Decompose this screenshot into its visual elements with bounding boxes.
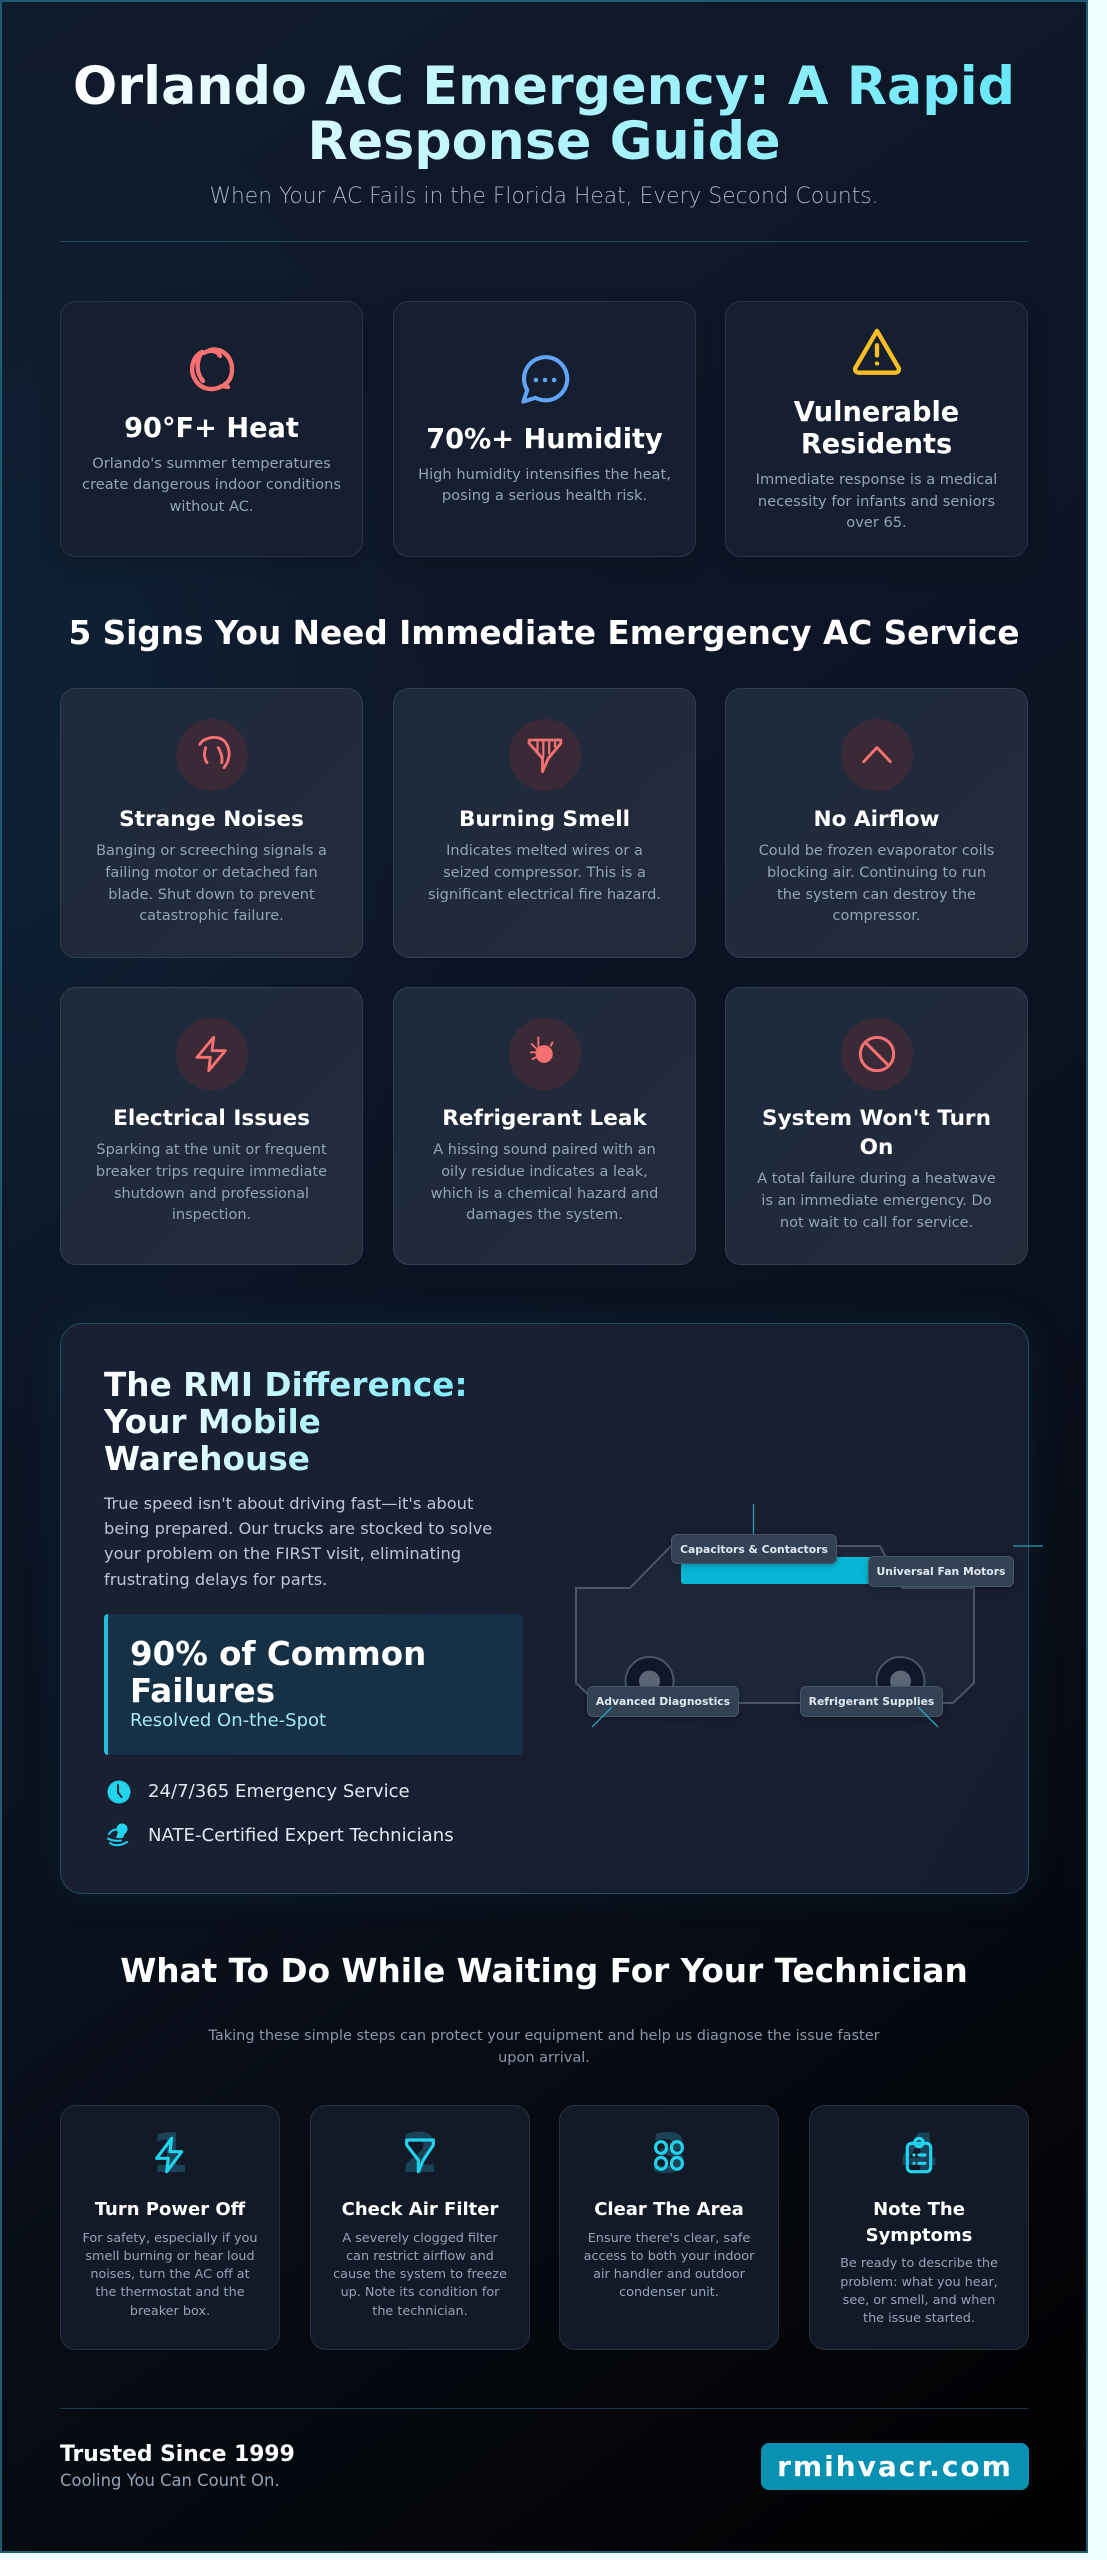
- panel: strange noises: [60, 688, 363, 958]
- panel: burning smell: [393, 688, 696, 958]
- text: Orlando's summer temperatures create dangerous indoor conditions without AC.: [82, 455, 341, 515]
- label: fan motors: [868, 1556, 1014, 1587]
- footer: website button: [761, 2443, 1029, 2490]
- callout lines: [592, 1504, 1043, 1728]
- label: fan motors: Universal Fan Motors: [876, 1565, 1005, 1578]
- panel: refrigerant leak: [393, 987, 696, 1265]
- heading: Refrigerant Leak: [442, 1106, 647, 1130]
- label: refrigerant: [800, 1686, 943, 1717]
- text: High humidity intensifies the heat, posing a serious health risk.: [418, 466, 671, 504]
- heading: signs: 5 Signs You Need Immediate Emergency AC Service: [68, 614, 1020, 652]
- heading: Strange Noises: [119, 806, 304, 832]
- label: NATE-Certified Expert Technicians: [148, 1825, 454, 1846]
- heading: Electrical Issues: [113, 1106, 310, 1130]
- step number: 3: [650, 2122, 688, 2185]
- panel: system won't turn on: [725, 987, 1028, 1265]
- title: Orlando AC Emergency: A Rapid Response Guide: [73, 56, 1015, 172]
- icon: warning triangle: [852, 328, 902, 375]
- text: A total failure during a heatwave is an immediate emergency. Do not wait to call for service.: [757, 1171, 996, 1231]
- heading: Clear The Area: [594, 2199, 744, 2220]
- text: Be ready to describe the problem: what you hear, see, or smell, and when the issue started.: [840, 2256, 998, 2326]
- icon: four rings: [654, 2140, 684, 2171]
- heading: Check Air Filter: [342, 2199, 498, 2220]
- panel: no airflow: [725, 688, 1028, 958]
- step number: 2: [401, 2122, 439, 2185]
- label: 24/7/365 Emergency Service: [148, 1781, 410, 1802]
- icon: chat bubble: [521, 355, 570, 404]
- step number: 1: [151, 2122, 189, 2185]
- text: Sparking at the unit or frequent breaker trips require immediate shutdown and professional inspection.: [96, 1142, 327, 1223]
- icon: chevron: [841, 719, 913, 791]
- feature: emergency service: [108, 1780, 410, 1804]
- text: Banging or screeching signals a failing motor or detached fan blade. Shut down to prevent catastrophic failure.: [96, 843, 327, 924]
- stat label: Resolved On-the-Spot: [130, 1710, 326, 1731]
- panel: vulnerable residents: [725, 301, 1028, 557]
- panel: check air filter: [310, 2105, 530, 2350]
- text: RMI intro: True speed isn't about driving fast—it's about being prepared. Our trucks are stocked to solve your problem on the FIRST visit, eliminating frustrating delays for parts.: [104, 1494, 492, 1589]
- panel: electrical issues: [60, 987, 363, 1265]
- panel: note the symptoms: [809, 2105, 1029, 2350]
- label: diagnostics: [587, 1686, 739, 1717]
- footer: trust statement: [60, 2442, 295, 2490]
- heading: System Won't Turn On: [762, 1106, 991, 1160]
- text: Could be frozen evaporator coils blocking air. Continuing to run the system can destroy the compressor.: [759, 843, 994, 924]
- feature: certified technicians: [107, 1824, 454, 1846]
- subtitle: When Your AC Fails in the Florida Heat, Every Second Counts.: [209, 184, 879, 209]
- icon: clipboard: [906, 2136, 932, 2174]
- text: Ensure there's clear, safe access to both your indoor air handler and outdoor condenser unit.: [584, 2231, 754, 2300]
- callout: 90% stat: [104, 1614, 523, 1755]
- icon: clock: [108, 1780, 130, 1804]
- heading: Turn Power Off: [95, 2199, 245, 2220]
- panel: RMI difference: [60, 1323, 1029, 1894]
- icon: funnel: [405, 2138, 435, 2174]
- icon: lightning: [155, 2136, 184, 2174]
- heading: while waiting: What To Do While Waiting For Your Technician: [120, 1952, 968, 1990]
- icon: technician badge: [107, 1824, 128, 1846]
- text: Indicates melted wires or a seized compressor. This is a significant electrical fire hazard.: [428, 843, 661, 903]
- icon: prohibited: [841, 1018, 913, 1090]
- step number: 4: [900, 2122, 938, 2185]
- diagram: service truck: [575, 1504, 1043, 1728]
- heading: Note The Symptoms: [866, 2199, 972, 2246]
- icon: lightning: [176, 1018, 248, 1090]
- heading: 70%+ Humidity: [426, 424, 663, 455]
- text: Immediate response is a medical necessity for infants and seniors over 65.: [756, 471, 997, 531]
- label: refrigerant: Refrigerant Supplies: [809, 1695, 934, 1708]
- label: diagnostics: Advanced Diagnostics: [596, 1695, 730, 1708]
- heading: No Airflow: [814, 806, 939, 832]
- truck body: [575, 1545, 975, 1704]
- heading: RMI difference: The RMI Difference: Your Mobile Warehouse: [104, 1366, 468, 1478]
- panel: clear the area: [559, 2105, 779, 2350]
- tagline: Cooling You Can Count On.: [60, 2471, 280, 2490]
- icon: funnel: [509, 719, 581, 791]
- panel: turn power off: [60, 2105, 280, 2350]
- footer: website button: rmihvacr.com: [777, 2450, 1013, 2483]
- icon: leak drop: [509, 1018, 581, 1090]
- stat number: 90% of Common Failures: [130, 1635, 426, 1710]
- icon: noise: [176, 719, 248, 791]
- icon: heat swirl: [190, 347, 234, 392]
- label: capacitors: Capacitors & Contactors: [680, 1542, 828, 1556]
- heading: Burning Smell: [459, 806, 630, 832]
- panel: humidity stat: [393, 301, 696, 557]
- label: capacitors: [671, 1534, 837, 1564]
- text: For safety, especially if you smell burning or hear loud noises, turn the AC off at the thermostat and the breaker box.: [82, 2231, 258, 2319]
- heading: 90°F+ Heat: [124, 413, 299, 444]
- text: A severely clogged filter can restrict airflow and cause the system to freeze up. Note its condition for the technician.: [333, 2231, 507, 2319]
- heading: Vulnerable Residents: [794, 397, 959, 460]
- panel: heat stat: [60, 301, 363, 557]
- text: A hissing sound paired with an oily residue indicates a leak, which is a chemical hazard and damages the system.: [431, 1142, 658, 1223]
- heading: Trusted Since 1999: [60, 2442, 295, 2467]
- text: while waiting intro: Taking these simple steps can protect your equipment and help us diagnose the issue faster upon arrival.: [208, 2028, 880, 2066]
